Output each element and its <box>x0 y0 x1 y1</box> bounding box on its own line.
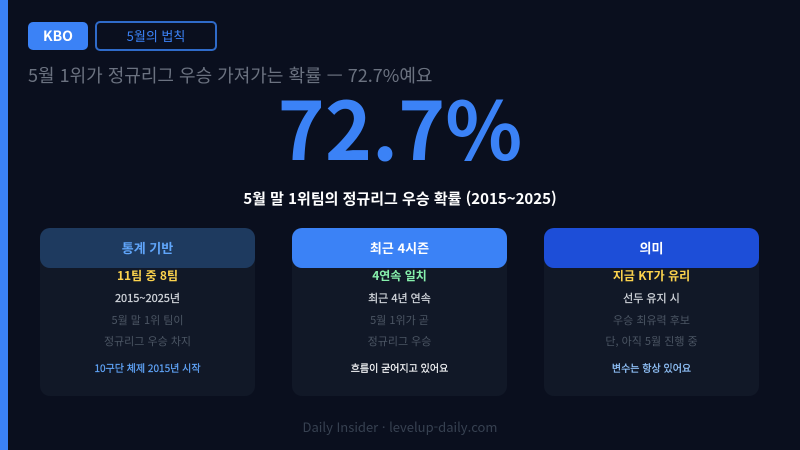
big number: 72.7% <box>278 68 522 184</box>
subtitle: 5월 1위가 정규리그 우승 가져가는 확률 — 72.7%예요 <box>28 62 432 88</box>
footnote: 변수는 항상 있어요 <box>612 360 691 375</box>
badge: KBO: KBO <box>43 26 73 46</box>
panel header <box>40 228 255 268</box>
description line: 5월 1위가 곧 <box>370 312 429 328</box>
description line: 정규리그 우승 <box>368 333 431 349</box>
badge: KBO <box>28 22 88 50</box>
footer: Daily Insider · levelup-daily.com <box>303 417 497 436</box>
left accent bar <box>0 0 8 450</box>
panel header <box>292 228 507 268</box>
description line: 단, 아직 5월 진행 중 <box>605 333 698 349</box>
key stat: 11팀 중 8팀 <box>117 267 178 284</box>
badge: 5월의 법칙 <box>95 21 217 51</box>
panel header <box>544 228 759 268</box>
detail line: 최근 4년 연속 <box>368 290 431 306</box>
panel header: 통계 기반 <box>122 238 173 257</box>
panel: 최근 4시즌 <box>292 228 507 396</box>
key stat: 4연속 일치 <box>372 267 427 284</box>
panel header: 의미 <box>640 238 663 257</box>
heading: 5월 말 1위팀의 정규리그 우승 확률 (2015~2025) <box>243 188 557 209</box>
badge: 5월의 법칙: 5월의 법칙 <box>127 26 185 45</box>
panel: 의미 <box>544 228 759 396</box>
footnote: 10구단 체제 2015년 시작 <box>94 360 201 375</box>
detail line: 선두 유지 시 <box>623 290 680 306</box>
description line: 우승 최유력 후보 <box>613 312 690 328</box>
description line: 5월 말 1위 팀이 <box>111 312 184 328</box>
footnote: 흐름이 굳어지고 있어요 <box>351 360 448 375</box>
key stat: 지금 KT가 유리 <box>613 267 690 284</box>
detail line: 2015~2025년 <box>115 290 180 306</box>
panel header: 최근 4시즌 <box>370 238 429 257</box>
panel: 통계 기반 <box>40 228 255 396</box>
description line: 정규리그 우승 차지 <box>104 333 191 349</box>
